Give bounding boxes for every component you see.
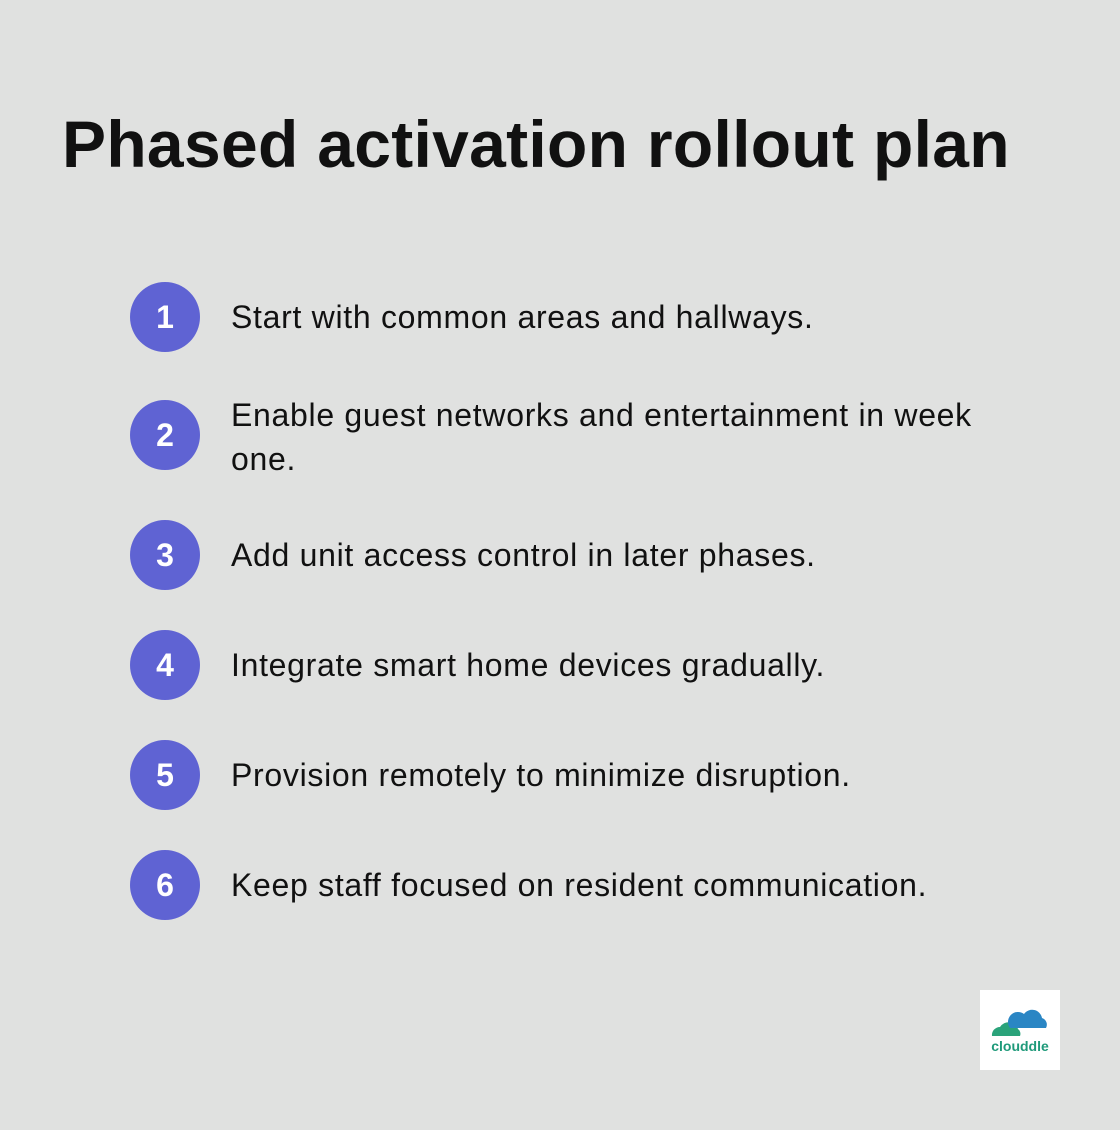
step 1 number: 1 [156, 299, 174, 335]
step 5 number: 5 [156, 757, 174, 793]
step 5 text: Provision remotely to minimize disruption. [231, 757, 851, 793]
step 5 number [130, 740, 200, 810]
step 6 number: 6 [156, 867, 174, 903]
logo [980, 990, 1060, 1070]
step 3 number: 3 [156, 537, 174, 573]
logo text: clouddle [991, 1038, 1049, 1054]
icon: clouds [992, 1010, 1047, 1036]
step 2 number: 2 [156, 417, 174, 453]
step 6 number [130, 850, 200, 920]
step 4 number: 4 [156, 647, 174, 683]
step 4 text: Integrate smart home devices gradually. [231, 647, 825, 683]
step 2 number [130, 400, 200, 470]
title: Phased activation rollout plan [62, 107, 1010, 181]
step 4 number [130, 630, 200, 700]
step 6 text: Keep staff focused on resident communication. [231, 867, 927, 903]
step 3 number [130, 520, 200, 590]
step 1 number [130, 282, 200, 352]
step 3 text: Add unit access control in later phases. [231, 537, 816, 573]
step 2 text: Enable guest networks and entertainment in week one. [231, 397, 972, 477]
step 1 text: Start with common areas and hallways. [231, 299, 814, 335]
